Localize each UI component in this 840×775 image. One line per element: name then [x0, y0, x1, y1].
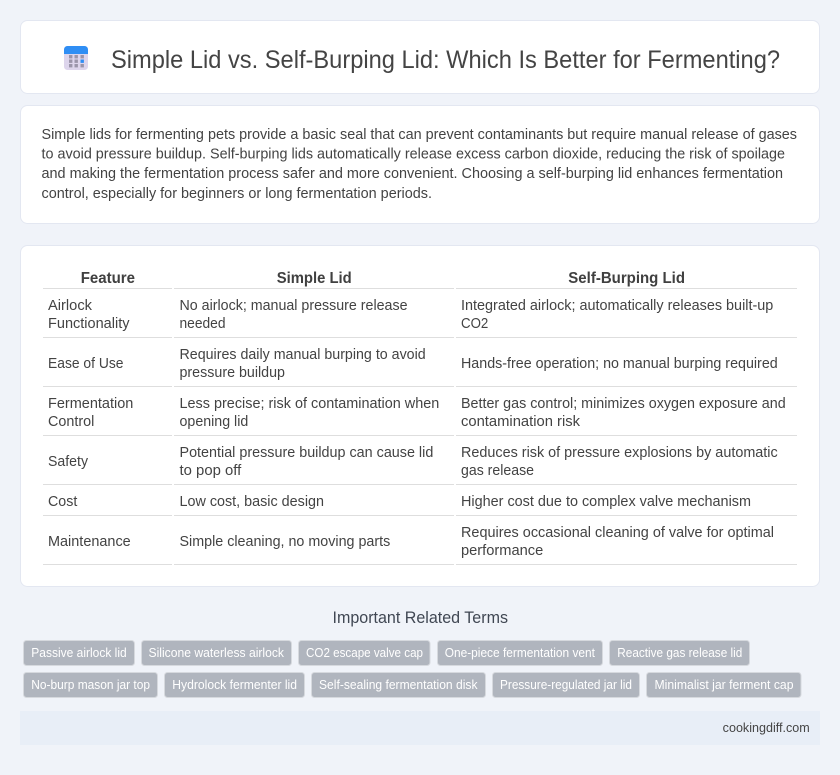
- tag row two: Hydrolock fermenter lid: [172, 678, 297, 692]
- tag row two: Self-sealing fermentation disk: [319, 678, 478, 692]
- row: maintenance: Requires occasional cleaning of valve for optimal: [461, 525, 774, 541]
- row: fermentation control: Control: [48, 414, 94, 430]
- row: airlock functionality: [48, 298, 773, 332]
- row: safety: [48, 445, 778, 479]
- footer source text: cookingdiff.com: [723, 721, 810, 735]
- row: fermentation control: opening lid: [180, 414, 248, 430]
- row: airlock functionality: CO2: [461, 316, 488, 332]
- panel: introduction: [20, 106, 820, 224]
- panel: title header: [20, 20, 820, 94]
- row: fermentation control: Fermentation: [48, 396, 133, 412]
- row: maintenance: [48, 525, 774, 559]
- intro text block: [42, 127, 797, 202]
- intro text block: and making the fermentation process safer and more convenient. Choosing a self-burping lid enhances fermentation: [42, 166, 783, 182]
- row: maintenance: Maintenance: [48, 534, 131, 550]
- title: Simple Lid vs. Self-Burping Lid: Which Is Better for Fermenting?: [111, 47, 780, 74]
- row: safety: to pop off: [180, 463, 242, 479]
- row: cost: Cost: [48, 494, 77, 510]
- row: ease of use: [48, 347, 778, 381]
- row: airlock functionality: needed: [180, 316, 226, 332]
- row: ease of use: Hands-free operation; no manual burping required: [461, 356, 778, 372]
- row: cost: Higher cost due to complex valve mechanism: [461, 494, 751, 510]
- tag row one: Passive airlock lid: [31, 646, 127, 660]
- intro text block: Simple lids for fermenting pets provide a basic seal that can prevent contaminants but require manual release of gases: [42, 127, 797, 143]
- intro text block: to avoid pressure buildup. Self-burping lids automatically release excess carbon dioxide, reducing the risk of spoilage: [42, 147, 785, 163]
- row: ease of use: Ease of Use: [48, 356, 124, 372]
- table header row: Simple Lid: [277, 270, 352, 287]
- row: fermentation control: contamination risk: [461, 414, 581, 430]
- tag row two: Pressure-regulated jar lid: [500, 678, 632, 692]
- section heading: Important Related Terms: [332, 609, 508, 627]
- tag row two: Minimalist jar ferment cap: [654, 678, 794, 692]
- row: fermentation control: Better gas control; minimizes oxygen exposure and: [461, 396, 786, 412]
- row: maintenance: performance: [461, 543, 543, 559]
- tag row one: Reactive gas release lid: [617, 646, 742, 660]
- row: safety: Safety: [48, 454, 89, 470]
- row: cost: [48, 494, 751, 510]
- row: airlock functionality: No airlock; manual pressure release: [180, 298, 408, 314]
- panel: comparison table: [20, 246, 820, 586]
- row: safety: gas release: [461, 463, 534, 479]
- row: airlock functionality: Airlock: [48, 298, 93, 314]
- tag row one: [24, 640, 750, 666]
- row: airlock functionality: Integrated airlock; automatically releases built-up: [461, 298, 773, 314]
- table header row: [81, 270, 685, 287]
- intro text block: control, especially for beginners or long fermentation periods.: [42, 186, 432, 202]
- section: important related terms: [24, 609, 801, 698]
- row: safety: Potential pressure buildup can cause lid: [180, 445, 433, 461]
- row: fermentation control: Less precise; risk of contamination when: [180, 396, 439, 412]
- icon: calendar: [64, 46, 88, 70]
- tag row one: Silicone waterless airlock: [148, 646, 285, 660]
- tag row one: One-piece fermentation vent: [445, 646, 595, 660]
- row: ease of use: Requires daily manual burping to avoid: [180, 347, 426, 363]
- footer bar: [20, 711, 820, 745]
- row: cost: Low cost, basic design: [180, 494, 324, 510]
- row: ease of use: pressure buildup: [180, 365, 285, 381]
- tag row one: CO2 escape valve cap: [306, 646, 423, 660]
- row: maintenance: Simple cleaning, no moving parts: [180, 534, 390, 550]
- row: fermentation control: [48, 396, 786, 430]
- tag row two: [24, 672, 801, 698]
- table header row: Feature: [81, 270, 135, 287]
- row: airlock functionality: Functionality: [48, 316, 130, 332]
- tag row two: No-burp mason jar top: [31, 678, 150, 692]
- row: safety: Reduces risk of pressure explosions by automatic: [461, 445, 778, 461]
- table header row: Self-Burping Lid: [568, 270, 685, 287]
